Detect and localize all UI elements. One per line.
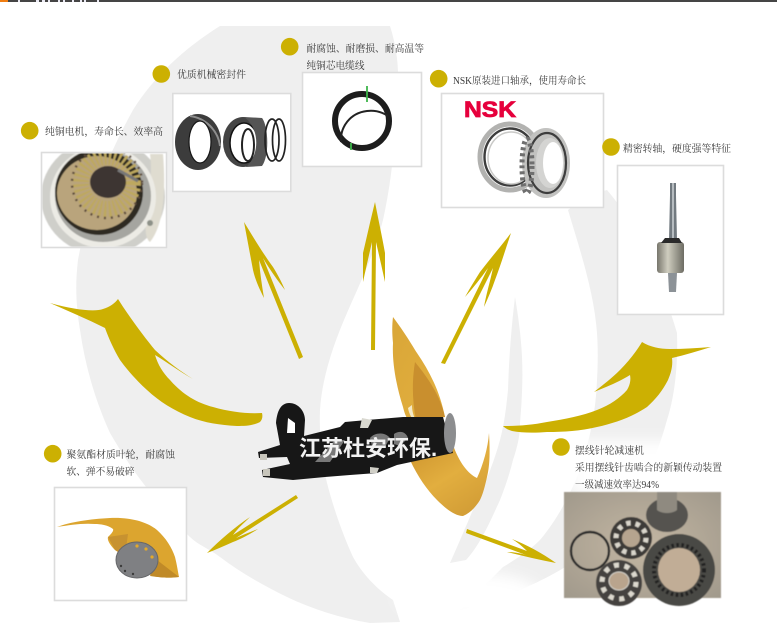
blades — [392, 317, 490, 516]
dot — [152, 65, 170, 83]
central agitator — [258, 317, 490, 516]
label — [575, 444, 722, 491]
item: cycloidal reducer — [552, 438, 722, 606]
top bar — [0, 0, 777, 2]
arrow: curved to motor — [50, 299, 262, 426]
photo: seal rings — [173, 94, 291, 192]
dot — [552, 438, 570, 456]
label: 精密转轴，硬度强等特征 — [623, 142, 731, 155]
photo: bearing — [442, 94, 604, 208]
background swirl — [76, 26, 731, 623]
photo: motor stator — [40, 152, 168, 248]
arrow: to impeller — [207, 495, 298, 553]
watermark — [315, 432, 408, 462]
dot — [21, 122, 38, 140]
item: precision shaft — [602, 138, 731, 314]
body — [258, 403, 456, 480]
label: 采用摆线针齿啮合的新颖传动装置 — [575, 461, 722, 474]
item: copper cable — [281, 38, 424, 167]
dot — [281, 38, 299, 56]
item: mechanical seal — [152, 65, 291, 192]
photo: impeller blade — [54, 488, 186, 600]
label: 纯铜电机，寿命长、效率高 — [45, 125, 163, 138]
dot — [602, 138, 620, 156]
label — [306, 42, 424, 72]
item: copper motor — [21, 122, 167, 255]
label: 聚氨酯材质叶轮，耐腐蚀 — [66, 448, 176, 461]
label: NSK原装进口轴承，使用寿命长 — [453, 74, 586, 87]
label — [66, 448, 176, 478]
item: polyurethane impeller — [44, 445, 187, 600]
photo: cable coil — [302, 72, 422, 166]
logo: NSK: NSK — [464, 97, 516, 122]
arrow: to mechanical seal — [244, 222, 303, 359]
label: 纯铜芯电缆线 — [306, 59, 364, 72]
brand text: 江苏杜安环保. — [299, 436, 437, 461]
arrow: to cable — [363, 202, 385, 350]
label: 优质机械密封件 — [177, 68, 246, 81]
label: 摆线针轮减速机 — [575, 444, 644, 457]
dot — [430, 70, 448, 87]
arrow: to bearing — [441, 233, 511, 364]
item: NSK bearing — [430, 70, 604, 208]
dot — [44, 445, 62, 463]
label: 耐腐蚀、耐磨损、耐高温等 — [306, 42, 424, 55]
label: 一级减速效率达94% — [575, 478, 659, 491]
arrow: to reducer — [466, 529, 556, 563]
arrow: curved to shaft — [503, 342, 711, 433]
photo: reducer parts — [564, 492, 721, 606]
photo: shaft — [618, 166, 724, 314]
label: 软、弹不易破碎 — [66, 465, 134, 478]
